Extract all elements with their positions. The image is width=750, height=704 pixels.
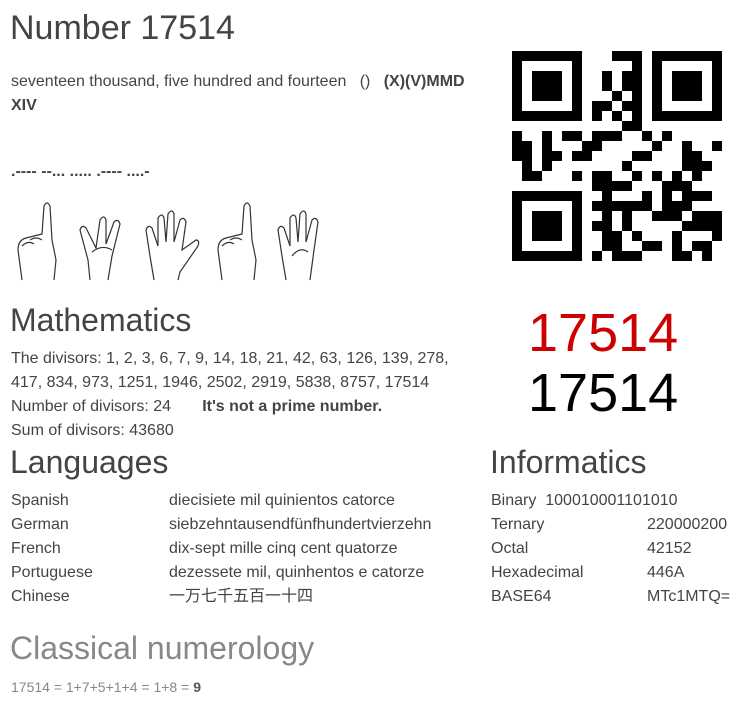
text: morse code: .---- --... ..... .---- ....- xyxy=(11,163,150,180)
table: languages: Chinese xyxy=(11,588,70,605)
text: math facts: The divisors: 1, 2, 3, 6, 7, 9, 14, 18, 21, 42, 63, 126, 139, 278, xyxy=(11,350,449,367)
table: languages xyxy=(11,492,93,605)
table: informatics: Binary 100010001101010 xyxy=(491,492,678,509)
text: 一万七千五百一十四 xyxy=(169,588,313,605)
text: numerology: 17514 = 1+7+5+1+4 = 1+8 = 9 xyxy=(11,679,201,695)
table: informatics: Hexadecimal xyxy=(491,564,583,581)
table: informatics: Octal xyxy=(491,540,528,557)
number: black: 17514 xyxy=(528,363,678,423)
table: informatics xyxy=(491,492,678,605)
icon: hand signs xyxy=(17,202,319,280)
table: informatics: Ternary xyxy=(491,516,544,533)
text: siebzehntausendfünfhundertvierzehn xyxy=(169,516,431,533)
text: 446A xyxy=(647,564,684,581)
text: number in words and roman: seventeen thousand, five hundred and fourteen () (X)(V)MMD XIV xyxy=(11,73,465,114)
text: math facts xyxy=(11,350,449,439)
text: dezessete mil, quinhentos e catorze xyxy=(169,564,424,581)
table: languages: Spanish xyxy=(11,492,69,509)
heading: Classical numerology: Classical numerology xyxy=(10,630,314,666)
heading: Mathematics: Mathematics xyxy=(10,302,191,338)
text: MTc1MTQ= xyxy=(647,588,730,605)
title: Number 17514 xyxy=(10,9,235,47)
text: dix-sept mille cinq cent quatorze xyxy=(169,540,398,557)
table: languages: German xyxy=(11,516,69,533)
text: 42152 xyxy=(647,540,692,557)
text: math facts: Number of divisors: 24 It's not a prime number. xyxy=(11,398,382,415)
text: 220000200 xyxy=(647,516,727,533)
table: languages: Portuguese xyxy=(11,564,93,581)
text: math facts: 417, 834, 973, 1251, 1946, 2502, 2919, 5838, 8757, 17514 xyxy=(11,374,429,391)
number: red: 17514 xyxy=(528,303,678,363)
text: diecisiete mil quinientos catorce xyxy=(169,492,395,509)
table: informatics: BASE64 xyxy=(491,588,551,605)
table: languages: French xyxy=(11,540,61,557)
heading: Languages: Languages xyxy=(10,444,168,480)
heading: Informatics: Informatics xyxy=(490,444,646,480)
text: math facts: Sum of divisors: 43680 xyxy=(11,422,174,439)
QR code xyxy=(512,51,722,261)
